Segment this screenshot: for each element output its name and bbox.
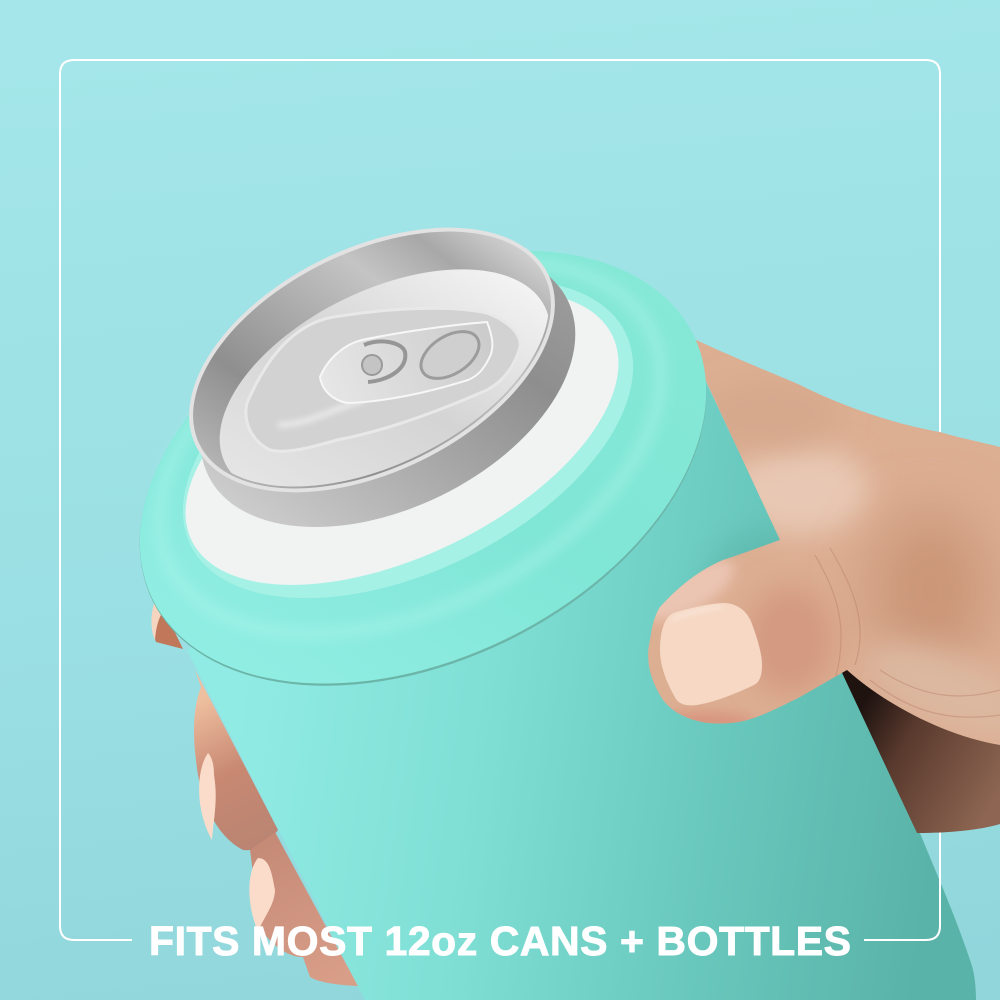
can rim — [147, 173, 597, 547]
tab hole — [413, 322, 487, 388]
skin tones — [637, 380, 1000, 755]
fingernail: upper — [151, 596, 164, 640]
holder body — [187, 380, 976, 1000]
palm and thumb — [648, 334, 1000, 745]
rivet — [362, 355, 382, 375]
rim seam — [68, 164, 778, 773]
hand — [637, 334, 1000, 833]
can inner wall — [152, 179, 592, 541]
outer rim — [69, 163, 777, 771]
nail highlight — [672, 607, 722, 620]
fingers behind the holder — [151, 596, 358, 986]
shadowed underside of palm — [836, 660, 1000, 833]
finger: lower — [250, 832, 358, 986]
can tab — [320, 322, 492, 403]
tab body — [320, 322, 492, 403]
white liner — [140, 230, 664, 646]
finger: middle — [194, 670, 278, 850]
white rounded frame — [60, 60, 940, 940]
lid scoring — [246, 308, 520, 451]
rim highlight — [99, 187, 721, 709]
holder rim — [68, 163, 778, 773]
can neck — [156, 192, 620, 584]
can lid — [220, 269, 548, 486]
fingertip: upper — [155, 612, 183, 649]
fingernail: middle — [199, 753, 216, 840]
fingernail: lower — [249, 858, 275, 932]
rivet ring — [364, 341, 405, 382]
thumbnail — [660, 603, 762, 705]
thumb shadow on holder — [700, 530, 820, 670]
inner rim — [133, 214, 683, 664]
caption: FITS MOST 12oz CANS + BOTTLES — [149, 918, 851, 964]
lid swirl — [278, 400, 365, 425]
can — [189, 228, 576, 527]
